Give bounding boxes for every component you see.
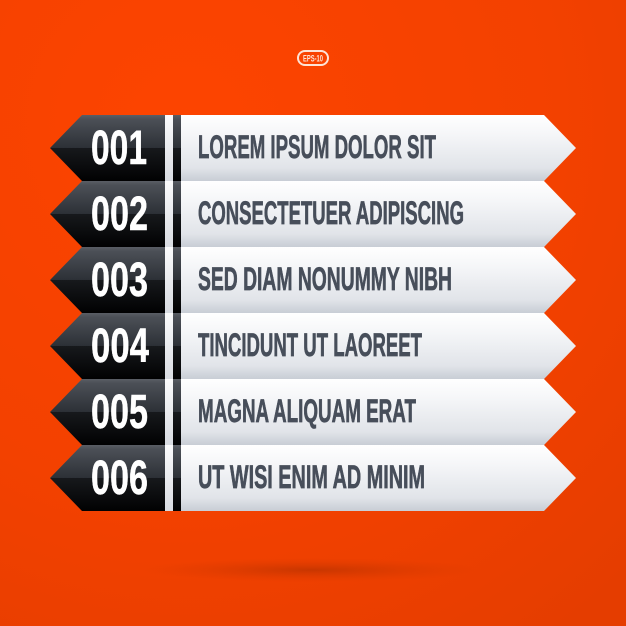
row 006: 006 — [91, 452, 148, 505]
row 001 — [50, 115, 576, 181]
row 004: TINCIDUNT UT LAOREET — [198, 327, 422, 363]
row 003: SED DIAM NONUMMY NIBH — [198, 261, 452, 297]
row 004: 004 — [91, 320, 149, 373]
row 001: 001 — [91, 122, 147, 175]
row 005: MAGNA ALIQUAM ERAT — [198, 393, 416, 429]
row 005: 005 — [91, 386, 148, 439]
row 004 — [50, 313, 576, 379]
row 003: 003 — [91, 254, 148, 307]
row 001: LOREM IPSUM DOLOR SIT — [198, 129, 436, 165]
row 003 — [50, 247, 576, 313]
floor shadow — [142, 558, 482, 582]
row 006: UT WISI ENIM AD MINIM — [198, 459, 425, 495]
row 002: 002 — [91, 188, 148, 241]
row 006 — [50, 445, 576, 511]
EPS-10 badge: EPS-10 — [303, 54, 323, 64]
EPS-10 badge — [298, 51, 328, 65]
row 005 — [50, 379, 576, 445]
row 002 — [50, 181, 576, 247]
